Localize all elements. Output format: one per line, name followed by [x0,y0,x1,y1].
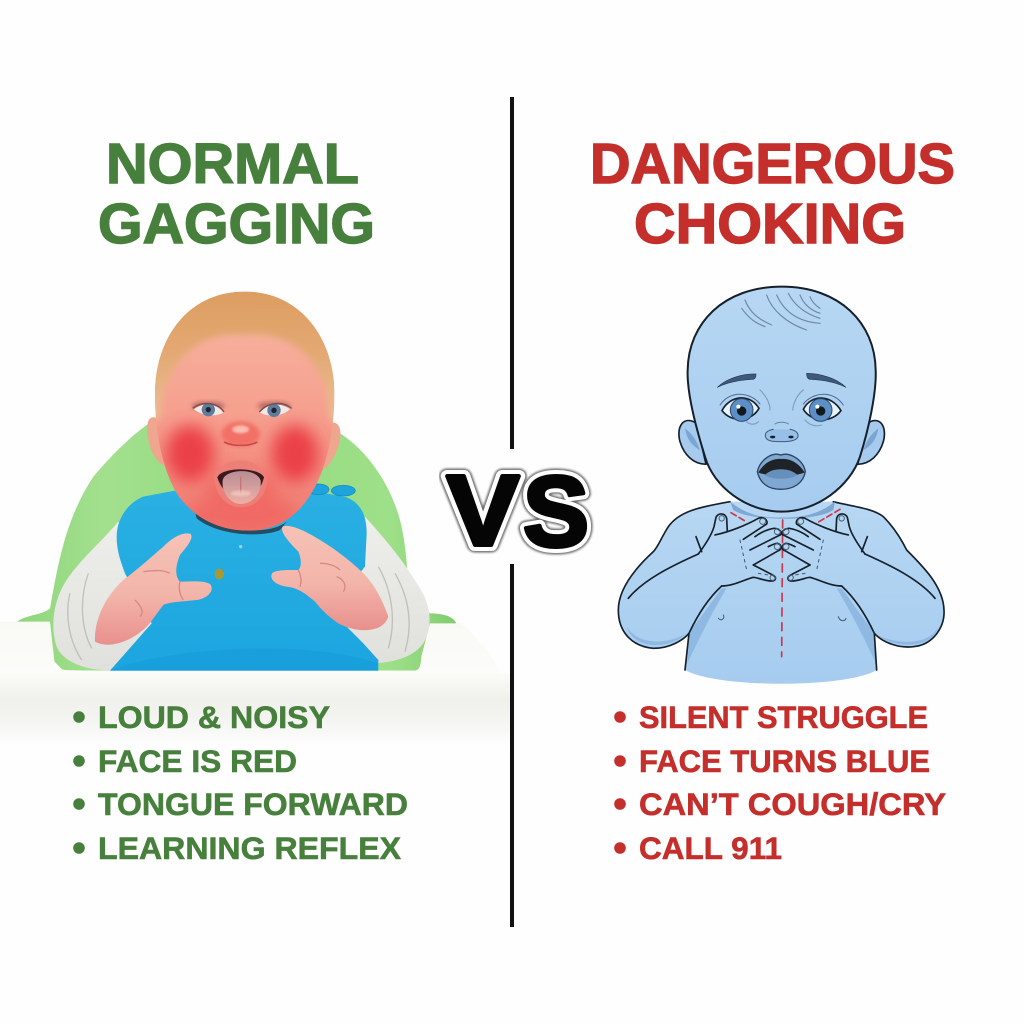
nose [765,422,798,442]
pinky finger [788,565,842,586]
pinky finger [722,565,775,586]
bib pocket fold [110,648,378,671]
high chair tray [0,622,510,747]
right hand [271,526,388,630]
divider line top [510,97,514,449]
bullets [74,712,84,854]
high chair backrest [16,423,456,671]
body outlines [618,502,944,670]
item: loud and noisy: LOUD & NOISY [98,699,330,735]
finger creases [135,563,345,617]
sleeve stripes [68,567,409,660]
head [155,292,334,531]
open mouth [757,454,805,489]
left ear [679,421,706,464]
left sleeve [53,522,160,670]
right ear [317,423,340,472]
shoulder crease [696,537,702,552]
bib snap buttons [308,484,355,496]
letter S: S [523,456,589,568]
heading: normal gagging: NORMAL [106,132,359,196]
right sleeve [320,517,430,663]
thumb [698,514,727,554]
thumb [836,514,865,554]
panel: dangerous choking [590,132,955,684]
bib [110,488,378,671]
chin shadow [730,502,835,519]
middle finger [782,528,813,550]
left hand [95,533,212,645]
left hand [628,514,781,598]
body [618,502,944,684]
worry lines [747,390,822,426]
heading: normal gagging: GAGGING [98,192,375,256]
ring finger [753,543,781,565]
eyes [192,401,292,417]
index finger [796,518,848,539]
cheek flush [166,425,318,482]
letter V: V [446,455,520,567]
right hand [782,514,935,598]
lower face flush [185,468,298,530]
item: learning reflex: LEARNING REFLEX [98,830,401,866]
item: tongue forward: TONGUE FORWARD [98,786,408,822]
infographic canvas [0,97,954,927]
list: normal gagging signs [74,699,408,866]
eyebrows [717,373,846,387]
photo: red-faced baby in high chair [0,283,510,747]
right eye [803,394,843,421]
left eye [720,394,760,421]
fingertip nails [783,516,844,580]
nose [221,421,260,447]
list: dangerous choking signs [614,699,946,866]
red arrows and centre line [731,509,840,657]
VS badge [446,455,589,568]
middle finger [750,528,781,550]
right ear [858,421,884,464]
fingertip nails [719,516,780,580]
heading: dangerous choking: DANGEROUS [590,132,955,196]
head [688,287,876,512]
panel: normal gagging [0,132,510,747]
nipples [718,615,846,621]
heading: dangerous choking [590,132,955,256]
shoulder crease [862,537,867,552]
item: silent struggle: SILENT STRUGGLE [639,699,928,735]
upper arm line [865,554,935,598]
left ear [147,417,170,467]
letter S: S [523,456,589,568]
neck shadow [195,512,287,534]
hair strands [742,293,820,330]
item: face turns blue: FACE TURNS BLUE [639,743,930,779]
hair [155,292,334,422]
open mouth [214,461,267,507]
item: call 911: CALL 911 [639,830,782,866]
knuckle ticks [740,540,823,575]
item: can't cough or cry: CAN’T COUGH/CRY [639,786,946,822]
food crumb [215,545,242,579]
body shading [627,588,938,663]
bullets [614,712,626,854]
upper arm line [628,554,698,598]
heading: normal gagging [98,132,375,256]
ring finger [782,543,810,565]
face skin [155,292,334,531]
tray front shading [0,673,510,747]
letter S: S [523,456,589,568]
heading: dangerous choking: CHOKING [634,192,906,256]
item: face is red: FACE IS RED [98,743,297,779]
index finger [715,518,767,539]
lower arm lines [689,586,874,633]
divider line bottom [510,564,514,927]
illustration: blue baby clutching throat [618,287,944,684]
letter V: V [446,455,520,567]
lash shadow [192,401,291,411]
letter V: V [446,455,520,567]
